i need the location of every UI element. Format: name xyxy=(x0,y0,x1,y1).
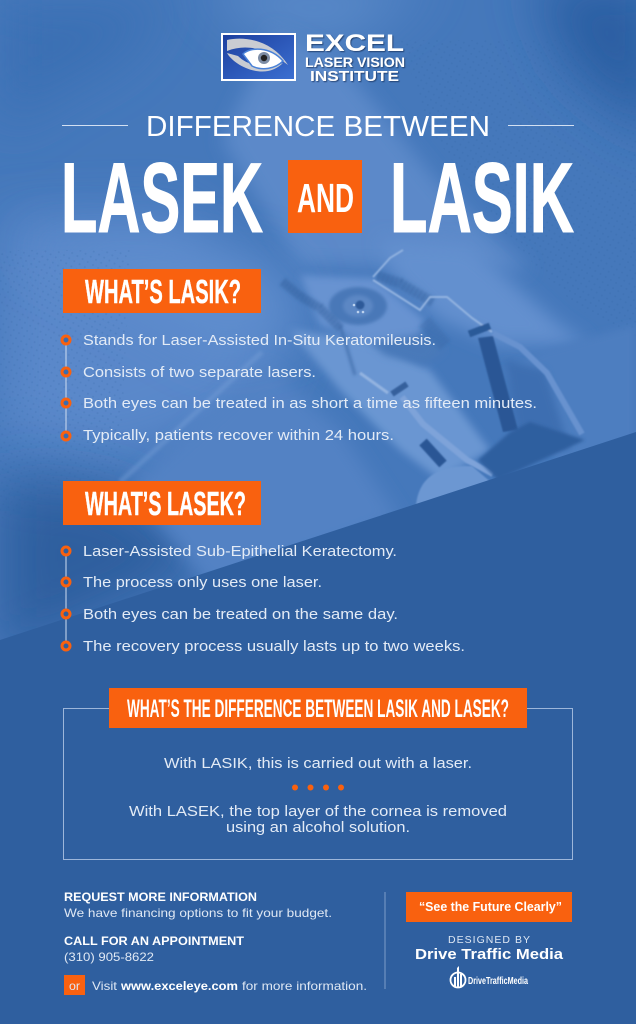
panel: what's LASEK xyxy=(62,481,465,655)
heading xyxy=(63,269,261,313)
footer credits xyxy=(406,892,572,988)
website line: or xyxy=(69,979,80,993)
bullet list: Consists of two separate lasers. xyxy=(83,365,316,381)
forehead / cheek skin xyxy=(380,240,590,345)
request information: We have financing options to fit your budget. xyxy=(64,906,332,920)
call for appointment: (310) 905-8622 xyxy=(64,950,154,964)
footer contact information xyxy=(64,890,367,995)
call for appointment: CALL FOR AN APPOINTMENT xyxy=(64,934,245,948)
request information: REQUEST MORE INFORMATION xyxy=(64,890,257,904)
footer divider xyxy=(384,892,386,989)
icon: Drive Traffic Media logo xyxy=(450,966,528,988)
panel: what's LASIK xyxy=(62,269,537,444)
heading: WHAT’S LASEK? xyxy=(85,485,246,522)
bullet list xyxy=(83,544,465,655)
timeline bullets xyxy=(62,336,70,440)
call for appointment xyxy=(64,934,245,964)
LASEK statement: With LASEK, the top layer of the cornea is removed xyxy=(129,804,507,820)
solid diagonal lower background xyxy=(0,432,636,1024)
website line: for more information. xyxy=(242,979,367,993)
panel frame xyxy=(64,708,572,860)
tagline badge: “See the Future Clearly” xyxy=(419,900,562,914)
title rule left xyxy=(62,125,128,126)
bullet list: Both eyes can be treated on the same day. xyxy=(83,607,398,623)
logo wordmark: INSTITUTE xyxy=(310,68,399,85)
website line: www.exceleye.com xyxy=(120,979,238,993)
instrument base shadow xyxy=(478,422,585,480)
bullet list: Typically, patients recover within 24 hours. xyxy=(83,428,394,444)
title block xyxy=(61,111,574,253)
title badge: AND: AND xyxy=(297,175,354,221)
logo wordmark xyxy=(305,30,405,85)
logo wordmark: LASER VISION xyxy=(305,54,405,70)
eye iris xyxy=(329,287,387,325)
logo: Excel Laser Vision Institute xyxy=(222,30,405,85)
request information xyxy=(64,890,332,920)
tagline badge xyxy=(406,892,572,922)
title word: LASEK: LASEK xyxy=(61,142,263,253)
bullet list: Both eyes can be treated in as short a time as fifteen minutes. xyxy=(83,396,537,412)
title badge: AND xyxy=(288,160,362,233)
glove fingertip xyxy=(416,466,500,510)
bullet list: Stands for Laser-Assisted In-Situ Keratomileusis. xyxy=(83,333,436,349)
logo icon: eye xyxy=(222,34,295,80)
website line: Visit xyxy=(92,979,118,993)
bullet list: Laser-Assisted Sub-Epithelial Keratectomy. xyxy=(83,544,397,560)
speculum instrument xyxy=(360,250,582,474)
website line xyxy=(64,975,367,995)
heading: WHAT’S LASIK? xyxy=(85,273,241,310)
designer name: Drive Traffic Media xyxy=(415,946,564,963)
bullet list xyxy=(83,333,537,444)
designed by label: DESIGNED BY xyxy=(448,934,530,946)
subtitle: DIFFERENCE BETWEEN xyxy=(146,111,490,143)
logo wordmark: EXCEL xyxy=(305,30,404,57)
panel heading xyxy=(109,688,527,728)
glove on the right xyxy=(505,325,636,465)
timeline bullets xyxy=(62,547,70,650)
LASEK statement: using an alcohol solution. xyxy=(226,820,410,836)
heading xyxy=(63,481,261,525)
eye shadow under lower lid xyxy=(370,335,445,365)
bullet list: The process only uses one laser. xyxy=(83,575,322,591)
panel: difference between LASIK and LASEK xyxy=(64,688,572,860)
title rule right xyxy=(508,125,574,126)
LASEK statement xyxy=(129,804,507,836)
LASIK statement: With LASIK, this is carried out with a laser. xyxy=(164,756,472,772)
eyelashes xyxy=(283,276,445,375)
dot separator xyxy=(292,784,344,790)
icon: Drive Traffic Media logo: DriveTrafficMedia xyxy=(468,976,528,987)
bullet list: The recovery process usually lasts up to two weeks. xyxy=(83,639,465,655)
